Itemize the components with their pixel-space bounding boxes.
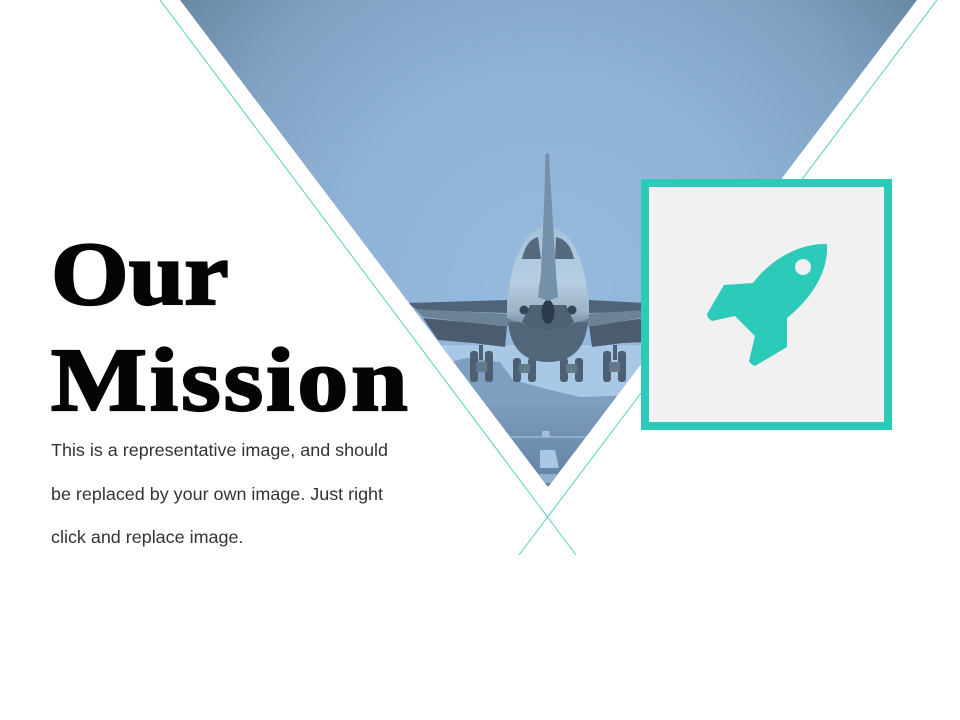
title [51,225,411,430]
icon: rocket [707,244,827,366]
wings [408,300,507,313]
body text: click and replace image. [51,527,243,547]
decorative crossing line left [160,0,576,555]
title: Mission [51,331,411,430]
body text [51,440,388,547]
landing gear [470,345,626,382]
belly [508,322,588,362]
icon panel with rocket [641,179,892,430]
body text: This is a representative image, and should [51,440,388,460]
fuselage [507,227,589,326]
runway marks [540,450,559,468]
ground [486,405,610,487]
decorative crossing line right [519,0,937,555]
title: Our [51,225,229,324]
hills [453,358,618,407]
photo: airplane landing [170,0,930,495]
body text: be replaced by your own image. Just right [51,484,383,504]
photo triangle and decorative frame [160,0,938,556]
cockpit windows [522,237,541,259]
engine and tail cone [542,300,554,324]
tail fin [538,153,558,301]
